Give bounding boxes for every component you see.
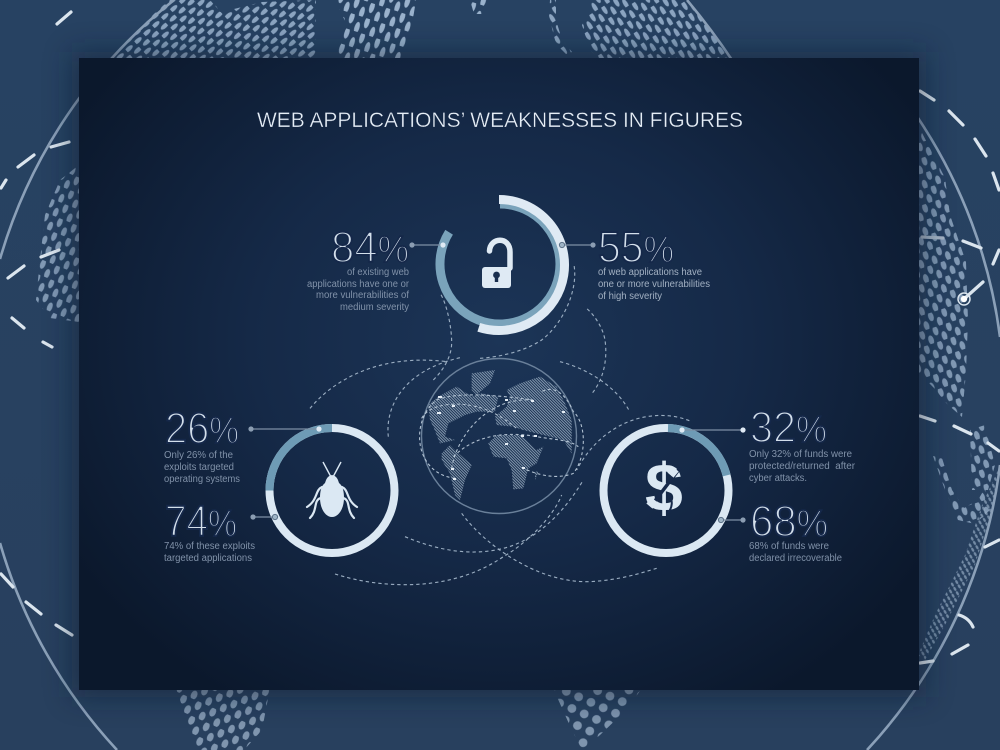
panel: main (79, 58, 919, 690)
caption: 84 percent: medium severity (340, 302, 409, 313)
caption: 55 percent (598, 267, 710, 302)
dashed network lines (310, 265, 689, 585)
globe route lines (420, 389, 583, 478)
ring: 74 percent (270, 428, 394, 553)
caption: 84 percent: more vulnerabilities of (316, 290, 409, 301)
icon: open padlock (482, 240, 511, 288)
connector: 84 percent (409, 242, 446, 248)
globe continents (428, 370, 572, 500)
lock chart (307, 200, 710, 330)
caption: 32 percent: cyber attacks. (749, 473, 807, 484)
caption: 26 percent: exploits targeted (164, 462, 234, 473)
caption: 26 percent: operating systems (164, 474, 240, 485)
caption: 32 percent: protected/returned after (749, 461, 856, 472)
arc: 32 percent (668, 428, 727, 475)
connector: 68 percent (718, 517, 746, 523)
stat: 32 percent: 32% (750, 403, 827, 452)
caption: 55 percent: of web applications have (598, 267, 702, 278)
panel shadow (72, 52, 926, 697)
globe outline (422, 358, 576, 514)
caption: 32 percent (749, 449, 856, 484)
title: WEB APPLICATIONS’ WEAKNESSES IN FIGURES (257, 109, 743, 132)
arc: 55 percent (479, 200, 565, 330)
background location marker (958, 293, 970, 305)
caption: 74 percent: 74% of these exploits (164, 541, 255, 552)
stat: 84 percent: 84% (331, 223, 409, 272)
stat: 26 percent: 26% (165, 404, 239, 453)
caption: 55 percent: one or more vulnerabilities (598, 279, 710, 290)
connector: 55 percent (559, 242, 596, 248)
central globe (420, 358, 583, 514)
caption: 74 percent (164, 541, 255, 564)
caption: 26 percent (164, 450, 240, 485)
connector: 32 percent (679, 427, 746, 433)
connector: 74 percent (250, 514, 278, 520)
icon: bug (307, 462, 357, 518)
caption: 74 percent: targeted applications (164, 553, 252, 564)
caption: 84 percent: applications have one or (307, 279, 410, 290)
caption: 68 percent: 68% of funds were (749, 541, 829, 552)
caption: 32 percent: Only 32% of funds were (749, 449, 852, 460)
globe route markers (437, 396, 565, 480)
connector: 26 percent (248, 426, 322, 432)
arc: 84 percent (440, 204, 560, 324)
caption: 55 percent: of high severity (598, 291, 662, 302)
icon: broken dollar: $ (645, 450, 683, 526)
arc: 26 percent (270, 428, 332, 490)
stat: 68 percent: 68% (750, 497, 828, 546)
caption: 84 percent (307, 267, 410, 313)
bug chart (164, 404, 394, 564)
caption: 68 percent (749, 541, 842, 564)
stat: 74 percent: 74% (165, 497, 237, 546)
caption: 84 percent: of existing web (347, 267, 409, 278)
dollar chart (604, 403, 856, 564)
ring: 68 percent (604, 428, 728, 553)
caption: 68 percent: declared irrecoverable (749, 553, 842, 564)
stat: 55 percent: 55% (598, 223, 674, 272)
caption: 26 percent: Only 26% of the (164, 450, 233, 461)
